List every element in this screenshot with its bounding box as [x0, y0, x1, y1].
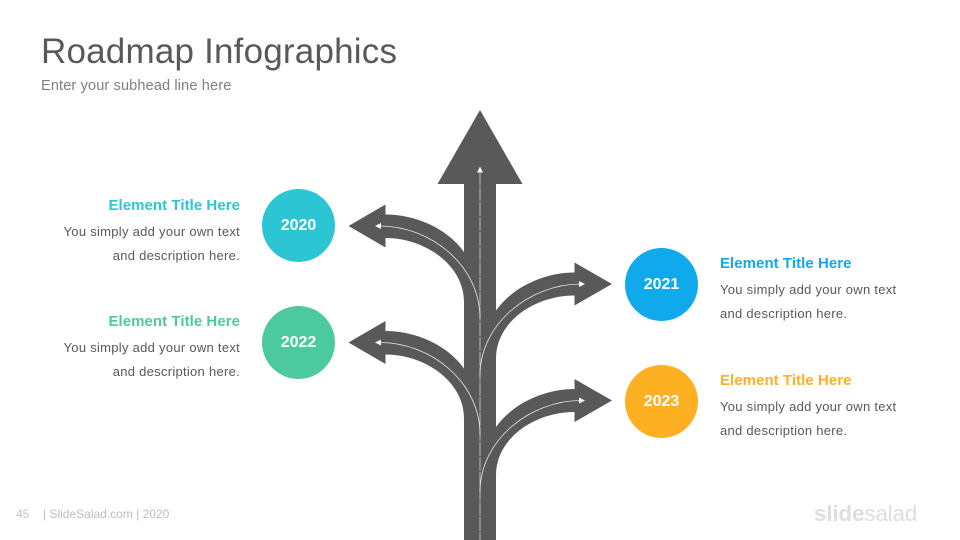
element title: Element Title Here — [108, 313, 240, 330]
description: and description here. — [720, 306, 847, 321]
logo: slidesalad — [814, 501, 917, 526]
subhead: Enter your subhead line here — [41, 78, 231, 94]
description: You simply add your own text — [720, 282, 896, 297]
description — [64, 340, 240, 379]
circle 2023 — [625, 365, 698, 438]
text block 2023 — [720, 372, 896, 438]
circle 2021: 2021 — [644, 276, 679, 293]
main road arrow — [438, 110, 522, 540]
circle 2022 — [262, 306, 335, 379]
text block 2022 — [64, 313, 240, 379]
description: You simply add your own text — [64, 224, 240, 239]
element title: Element Title Here — [720, 372, 852, 389]
description: and description here. — [113, 248, 240, 263]
branch arrow 2022 — [348, 321, 480, 434]
description: You simply add your own text — [64, 340, 240, 355]
circle 2021 — [625, 248, 698, 321]
circle 2020 — [262, 189, 335, 262]
title: Roadmap Infographics — [41, 32, 397, 71]
description: You simply add your own text — [720, 399, 896, 414]
circle 2023: 2023 — [644, 393, 679, 410]
circle 2022: 2022 — [281, 334, 316, 351]
description — [720, 282, 896, 321]
element title: Element Title Here — [720, 255, 852, 272]
description — [720, 399, 896, 438]
text block 2020 — [64, 197, 240, 263]
branch arrow 2023 — [480, 379, 612, 492]
footer text: | SlideSalad.com | 2020 — [43, 507, 169, 521]
branch arrow 2020 — [348, 204, 480, 318]
description: and description here. — [720, 423, 847, 438]
branch arrow 2021 — [480, 262, 612, 376]
page number: 45 — [16, 507, 29, 521]
circle 2020: 2020 — [281, 217, 316, 234]
text block 2021 — [720, 255, 896, 321]
element title: Element Title Here — [108, 197, 240, 214]
description: and description here. — [113, 364, 240, 379]
description — [64, 224, 240, 263]
